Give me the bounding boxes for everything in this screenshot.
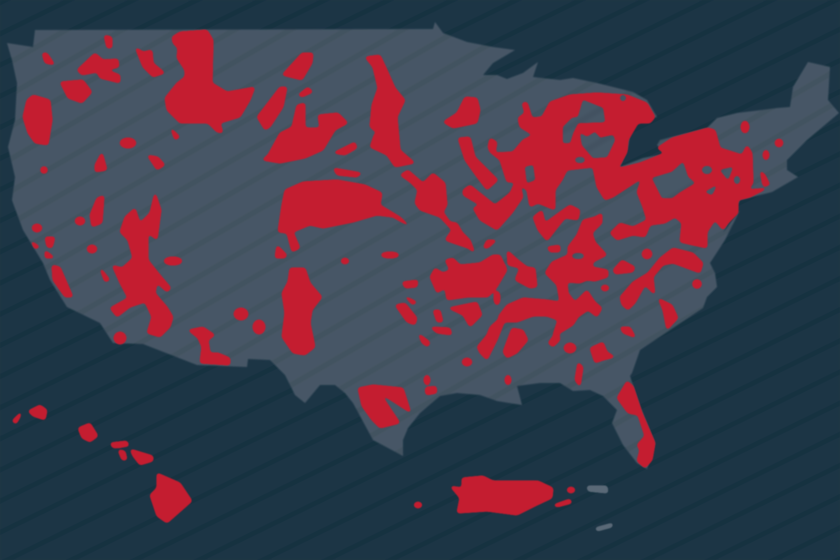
Puerto Rico and neighbouring islands — [414, 476, 575, 515]
South and Southeast region — [358, 205, 703, 468]
red affected areas: mainland — [23, 30, 783, 468]
west region — [23, 30, 287, 365]
Great Lakes and Northeast region — [488, 93, 783, 248]
US Virgin Islands — [587, 486, 613, 531]
unaffected land gaps inside the red areas — [525, 95, 740, 259]
map: contiguous United States landmass — [7, 22, 839, 469]
Hawaii islands — [12, 405, 192, 523]
central region — [262, 53, 528, 366]
